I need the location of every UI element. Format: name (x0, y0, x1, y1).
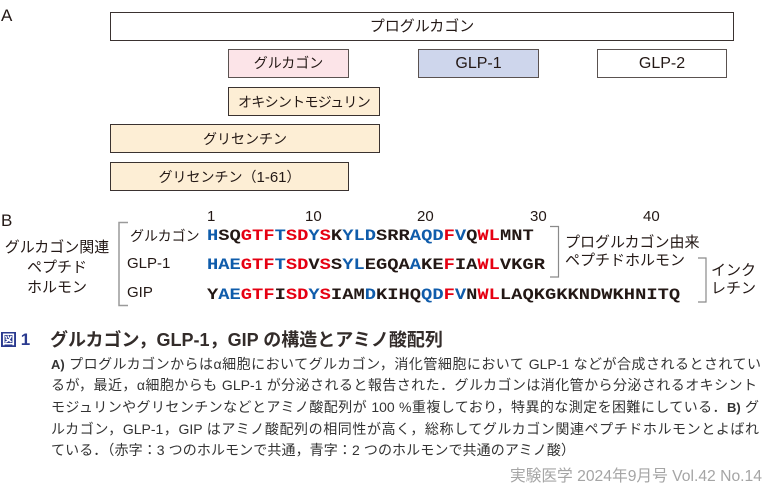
label: proglucagon-derived peptide hormones: ペプチドホルモン (565, 252, 685, 269)
sequence: GLP-1: HAEGTFTSDVSSYLEGQAAKEFIAWLVKGR (207, 256, 545, 274)
right bracket: incretin (698, 257, 707, 303)
bar: GLP-2 (597, 49, 727, 78)
bar: proglucagon (110, 12, 734, 41)
bar: GLP-2: GLP-2 (639, 55, 685, 72)
bar: GLP-1 (418, 49, 539, 78)
label: proglucagon-derived peptide hormones: プログルカゴン由来 (565, 234, 700, 251)
caption text: ている．（赤字：3 つのホルモンで共通，青字：2 つのホルモンで共通のアミノ酸） (51, 442, 575, 458)
peptide names (127, 228, 200, 301)
bar: oxyntomodulin: オキシントモジュリン (238, 94, 370, 110)
figure number (1, 330, 30, 349)
caption text: A) プログルカゴンからはα細胞においてグルカゴン，消化管細胞において GLP-1 などが合成されるとされてい (51, 356, 761, 372)
label: proglucagon-derived peptide hormones (565, 234, 700, 269)
group label: glucagon-related peptide hormones (5, 239, 109, 296)
sequence: GIP: YAEGTFISDYSIAMDKIHQQDFVNWLLAQKGKKNDWKHNITQ (207, 286, 680, 304)
residue position numbers: 40 (643, 208, 660, 225)
figure title: グルカゴン，GLP-1，GIP の構造とアミノ酸配列 (50, 330, 443, 350)
label: incretin: インク (711, 262, 756, 279)
bar: glicentin: グリセンチン (203, 131, 287, 147)
sequence: glucagon: HSQGTFTSDYSKYLDSRRAQDFVQWLMNT (207, 227, 534, 245)
residue position numbers: 10 (305, 208, 322, 225)
figure number: 図 (2, 332, 15, 347)
label: incretin (711, 262, 756, 297)
bar: proglucagon: プログルカゴン (370, 18, 474, 35)
caption text: ルカゴン，GLP-1，GIP はアミノ酸配列の相同性が高く，総称してグルカゴン関連ペプチドホルモンとよばれ (51, 421, 759, 437)
bar: oxyntomodulin (228, 87, 380, 116)
residue position numbers: 30 (530, 208, 547, 225)
peptide names: GIP (127, 284, 153, 301)
peptide names: GLP-1 (127, 255, 170, 272)
residue position numbers: 1 (207, 208, 215, 225)
right bracket: proglucagon-derived (550, 226, 560, 278)
residue position numbers (207, 208, 660, 225)
group label: glucagon-related peptide hormones: ペプチド (27, 259, 87, 276)
bar: glicentin 1-61 (110, 162, 349, 191)
source credit: 実験医学 2024年9月号 Vol.42 No.14 (510, 468, 762, 485)
label B: B (1, 211, 12, 230)
caption text: るが，最近，α細胞からも GLP-1 が分泌されると報告された．グルカゴンは消化管から分泌されるオキシント (51, 377, 757, 393)
bar: glucagon: グルカゴン (254, 55, 323, 71)
label A: A (1, 6, 12, 25)
residue position numbers: 20 (417, 208, 434, 225)
caption text: モジュリンやグリセンチンなどとアミノ酸配列が 100 %重複しており，特異的な測定を困難にしている．B) グ (51, 399, 759, 415)
figure number: 1 (21, 330, 30, 349)
label: incretin: レチン (711, 280, 756, 297)
bar: GLP-1: GLP-1 (455, 55, 502, 72)
left bracket (118, 222, 128, 306)
group label: glucagon-related peptide hormones: ホルモン (27, 279, 87, 296)
bar: glicentin 1-61: グリセンチン（1-61） (158, 169, 301, 186)
peptide names: グルカゴン (130, 228, 200, 244)
caption text (51, 356, 761, 458)
bar: glucagon (228, 49, 349, 78)
bar: glicentin (110, 124, 380, 153)
group label: glucagon-related peptide hormones: グルカゴン関連 (5, 239, 109, 256)
